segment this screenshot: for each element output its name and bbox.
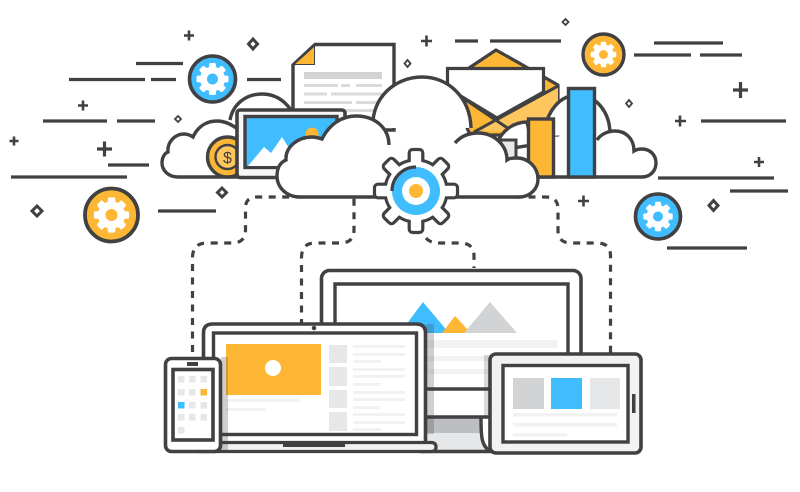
- bar chart: [528, 88, 594, 177]
- picture frame: [237, 110, 345, 178]
- desktop monitor: [322, 270, 581, 452]
- tablet: [490, 354, 641, 453]
- laptop video thumbnail: [226, 344, 321, 395]
- laptop sidebar list: [329, 345, 405, 431]
- icon: orange gear badge top right: [583, 34, 624, 75]
- icon: blue gear badge right: [636, 194, 680, 239]
- open envelope: [448, 50, 558, 135]
- right rear clouds: [497, 95, 656, 177]
- laptop: [198, 324, 436, 452]
- left background cloud: [162, 121, 245, 177]
- document with text lines: [293, 44, 394, 130]
- speed lines: [11, 41, 788, 248]
- smartphone: [166, 357, 228, 452]
- central rear cloud: [373, 77, 471, 128]
- central gear: [374, 150, 458, 232]
- icon: dollar coin: $: [223, 150, 232, 167]
- diamonds: [32, 19, 718, 216]
- front cloud: [277, 116, 538, 197]
- dashed connectors: [192, 197, 610, 354]
- rear cloud arc behind picture: [230, 94, 291, 120]
- icon: orange gear badge left: [85, 188, 138, 242]
- icon: blue gear badge top left: [190, 56, 236, 102]
- icon: dollar coin: [208, 137, 248, 177]
- plus signs: [10, 30, 764, 206]
